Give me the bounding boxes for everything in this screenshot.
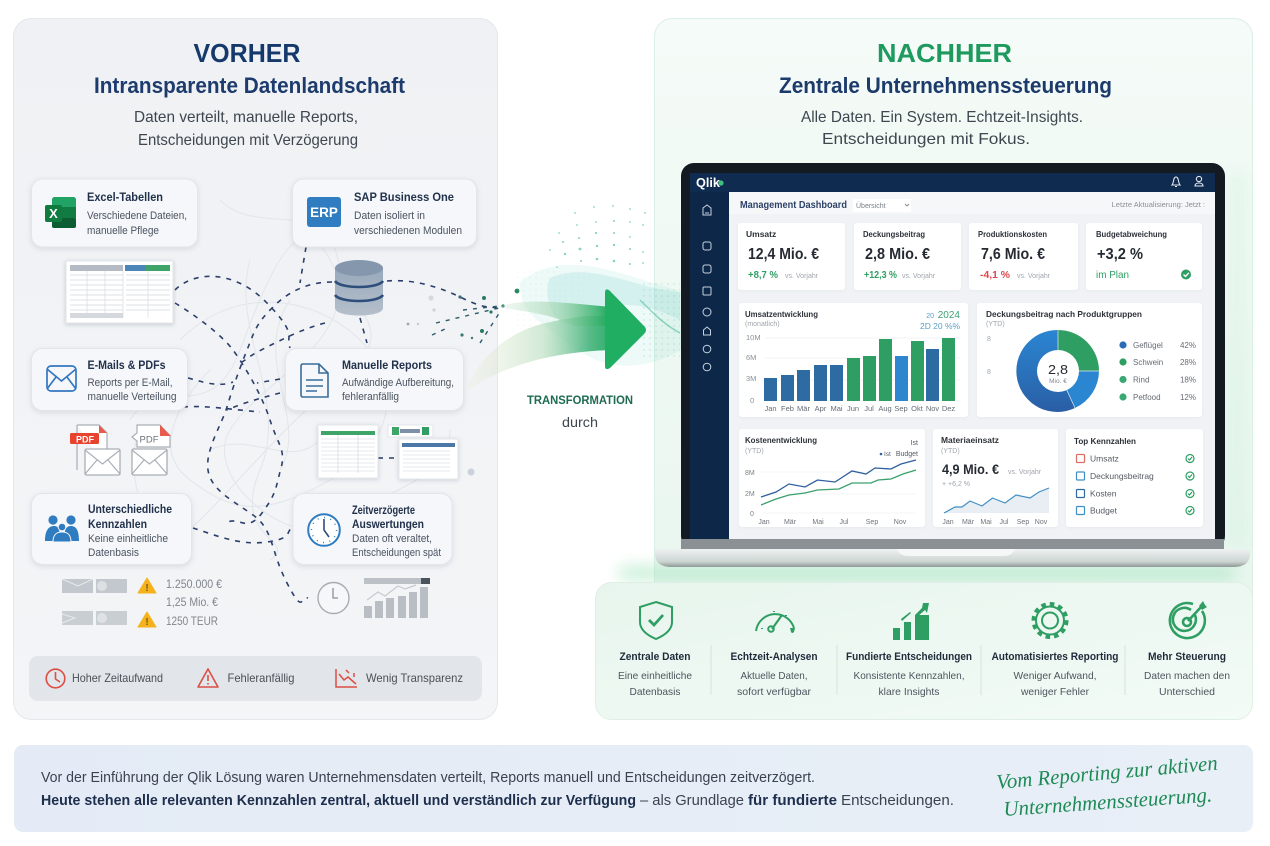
- card: E-Mails & PDFs: E-Mails & PDFs: [88, 358, 166, 372]
- kpi: Deckungsbeitrag: vs. Vorjahr: [902, 273, 936, 280]
- card: Manuelle Reports: Manuelle Reports: [342, 358, 432, 372]
- bar chart: Umsatzentwicklung: Umsatzentwicklung: [745, 309, 818, 319]
- kpi: Budgetabweichung: im Plan: [1096, 269, 1129, 281]
- subtitle: [801, 109, 1083, 148]
- card: Zeitverzögerte Auswertungen: Daten oft veraltet,: [352, 533, 432, 545]
- kpi: Deckungsbeitrag: Deckungsbeitrag: [863, 229, 925, 239]
- kpi: Produktionskosten: 7,6 Mio. €: [981, 246, 1045, 263]
- report sheet thumbnails: [318, 425, 458, 479]
- transformation arrow: [465, 205, 694, 430]
- bar chart: Umsatzentwicklung: Apr: [815, 404, 827, 413]
- icon: envelope: [47, 366, 76, 391]
- icons: bell and user: [1172, 176, 1203, 186]
- list: Top Kennzahlen: Umsatz: [1090, 454, 1119, 464]
- benefit: Fundierte Entscheidungen: Fundierte Entscheidungen: [846, 651, 972, 663]
- benefit: Zentrale Daten: Eine einheitliche: [618, 670, 692, 682]
- card: Unterschiedliche Kennzahlen: Keine einheitliche: [88, 533, 168, 545]
- line chart: Kostenentwicklung: Mär: [784, 519, 797, 526]
- line chart: Kostenentwicklung: 0: [750, 511, 754, 518]
- line chart: Kostenentwicklung: Jul: [840, 519, 849, 526]
- area chart: Materialeinsatz: Sep: [1017, 519, 1029, 526]
- subtitle: Alle Daten. Ein System. Echtzeit-Insights.: [801, 109, 1083, 126]
- card: Excel-Tabellen: Excel-Tabellen: [87, 190, 163, 204]
- footer text: [41, 769, 954, 809]
- area chart: Materialeinsatz: vs. Vorjahr: [1008, 469, 1042, 476]
- donut legend: [1119, 341, 1196, 402]
- line chart: Kostenentwicklung: Jan: [758, 519, 770, 526]
- excel sheet thumbnail: [66, 261, 173, 323]
- benefit: Mehr Steuerung: [1144, 601, 1230, 698]
- dashboard header: Letzte Aktualisierung: Jetzt :: [1112, 200, 1205, 209]
- bar chart: Umsatzentwicklung: 2024: [938, 310, 960, 321]
- area chart: Materialeinsatz: [933, 429, 1058, 527]
- bar chart: Umsatzentwicklung: Okt: [911, 404, 924, 413]
- list: Top Kennzahlen: [1066, 429, 1203, 527]
- kpi: Umsatz: vs. Vorjahr: [785, 273, 819, 280]
- line chart: Kostenentwicklung: Budget: [896, 451, 918, 458]
- card: E-Mails & PDFs: manuelle Verteilung: [88, 391, 176, 403]
- bar chart: Umsatzentwicklung: Jun: [847, 404, 859, 413]
- inconsistent figures: !: [145, 617, 149, 628]
- line chart: Kostenentwicklung: [739, 429, 925, 527]
- card: Zeitverzögerte Auswertungen: [293, 494, 452, 564]
- kpi: Umsatz: +8,7 %: [748, 269, 779, 281]
- panel: nachher: [654, 18, 1252, 618]
- donut legend: Schwein: [1133, 358, 1163, 367]
- icon: red clock: [46, 669, 65, 688]
- icon: ERP: ERP: [310, 205, 338, 220]
- benefit: Automatisiertes Reporting: weniger Fehler: [1020, 686, 1089, 698]
- kpi: Budgetabweichung: [1086, 223, 1202, 290]
- kpi: Budgetabweichung: +3,2 %: [1097, 246, 1143, 263]
- icon: document: [301, 364, 328, 397]
- kpi: Umsatz: [738, 223, 845, 290]
- donut legend: 28%: [1180, 358, 1196, 367]
- kpi: Produktionskosten: Produktionskosten: [978, 229, 1047, 239]
- laptop glow: [620, 568, 1235, 578]
- handwritten claim: [995, 751, 1219, 821]
- kpi: Produktionskosten: [969, 223, 1078, 290]
- benefit: Zentrale Daten: Zentrale Daten: [620, 651, 691, 663]
- footer text: Vor der Einführung der Qlik Lösung waren Unternehmensdaten verteilt, Reports manuell und Entscheidungen zeitverzögert.: [41, 769, 815, 786]
- donut legend: Geflügel: [1133, 341, 1163, 350]
- kpi: Produktionskosten: vs. Vorjahr: [1017, 273, 1051, 280]
- footer text: Heute stehen alle relevanten Kennzahlen zentral, aktuell und verständlich zur Verfügung: [41, 792, 636, 809]
- subtitle: Entscheidungen mit Fokus.: [822, 131, 1030, 148]
- grey clock and chart: [318, 578, 430, 618]
- kpi: Deckungsbeitrag: +12,3 %: [864, 269, 898, 281]
- card: Excel-Tabellen: Verschiedene Dateien,: [87, 210, 187, 222]
- card: E-Mails & PDFs: [32, 348, 188, 410]
- area chart: Materialeinsatz: Jul: [1000, 519, 1009, 526]
- laptop base: [655, 539, 1250, 567]
- sidebar: [690, 192, 729, 539]
- benefit: Echtzeit-Analysen: sofort verfügbar: [737, 686, 811, 698]
- card: Zeitverzögerte Auswertungen: Zeitverzögerte: [352, 503, 415, 517]
- benefit: Mehr Steuerung: Daten machen den: [1144, 670, 1230, 682]
- card: Manuelle Reports: fehleranfällig: [342, 391, 399, 403]
- benefit: Fundierte Entscheidungen: Konsistente Kennzahlen,: [854, 670, 964, 682]
- kpi: Umsatz: Umsatz: [746, 229, 776, 239]
- heading: vorher: [94, 38, 406, 98]
- card: Excel-Tabellen: manuelle Pflege: [87, 225, 159, 237]
- benefit: Automatisiertes Reporting: [992, 604, 1118, 698]
- bar chart: Umsatzentwicklung: Sep: [894, 404, 908, 413]
- footer text: für fundierte: [748, 792, 837, 809]
- area chart: Materialeinsatz: 4,9 Mio. €: [942, 461, 999, 477]
- bar chart: Umsatzentwicklung: 3M: [746, 374, 756, 383]
- footer text: Entscheidungen.: [841, 792, 954, 809]
- donut chart: Deckungsbeitrag: Deckungsbeitrag nach Produktgruppen: [986, 309, 1142, 319]
- card: Manuelle Reports: Aufwändige Aufbereitung,: [342, 377, 454, 389]
- benefit: Automatisiertes Reporting: Automatisiertes Reporting: [992, 651, 1118, 663]
- dashboard header: Management Dashboard: [740, 199, 847, 211]
- line chart: Kostenentwicklung: Ist: [911, 440, 918, 447]
- area chart: Materialeinsatz: Nov: [1035, 519, 1048, 526]
- card: Unterschiedliche Kennzahlen: Kennzahlen: [88, 517, 147, 531]
- green and grey data dots: [407, 289, 519, 343]
- bar chart: Umsatzentwicklung: 10M: [746, 333, 761, 342]
- inconsistent figures: [62, 578, 223, 628]
- icon: red warning: [198, 669, 218, 687]
- card: Zeitverzögerte Auswertungen: Auswertungen: [352, 517, 424, 531]
- teal dot field: [549, 205, 646, 268]
- donut legend: 12%: [1180, 393, 1196, 402]
- area chart: Materialeinsatz: Mai: [980, 519, 992, 526]
- heading: vorher: VORHER: [194, 38, 301, 68]
- donut chart: Deckungsbeitrag: 8: [987, 369, 991, 376]
- label: transformation: [527, 393, 633, 430]
- benefit: Fundierte Entscheidungen: klare Insights: [878, 686, 940, 698]
- benefit: Echtzeit-Analysen: Echtzeit-Analysen: [730, 651, 818, 663]
- database cylinder: [335, 260, 383, 316]
- card: Manuelle Reports: [286, 348, 464, 410]
- area chart: Materialeinsatz: Jan: [942, 519, 954, 526]
- bar chart: Umsatzentwicklung: Mai: [830, 404, 843, 413]
- pdf and mail icons: PDF: [76, 434, 95, 444]
- donut chart: Deckungsbeitrag: [977, 303, 1202, 417]
- area chart: Materialeinsatz: Mär: [962, 519, 975, 526]
- card: Unterschiedliche Kennzahlen: [32, 494, 192, 564]
- inconsistent figures: !: [145, 583, 149, 594]
- heading: vorher: Intransparente Datenlandschaft: [94, 73, 406, 98]
- area chart: Materialeinsatz: (YTD): [941, 448, 960, 455]
- line chart: Kostenentwicklung: Sep: [866, 519, 878, 526]
- subtitle: Daten verteilt, manuelle Reports,: [134, 109, 358, 126]
- kpi: Produktionskosten: -4,1 %: [980, 269, 1011, 281]
- bar chart: Umsatzentwicklung: Nov: [926, 404, 939, 413]
- benefit: Mehr Steuerung: Unterschied: [1159, 686, 1215, 698]
- donut chart: Deckungsbeitrag: 2,8: [1048, 362, 1068, 377]
- line chart: Kostenentwicklung: (YTD): [745, 448, 764, 455]
- bar chart: Umsatzentwicklung: 20: [926, 313, 934, 320]
- dashboard top bar: Qlik: [696, 176, 720, 190]
- card: SAP Business One: verschiedenen Modulen: [354, 225, 462, 237]
- bar chart: Umsatzentwicklung: 0: [750, 396, 754, 405]
- donut legend: 18%: [1180, 376, 1196, 384]
- label: transformation: TRANSFORMATION: [527, 393, 633, 407]
- benefit: Mehr Steuerung: Mehr Steuerung: [1148, 651, 1226, 663]
- bar chart: Umsatzentwicklung: Mär: [797, 404, 810, 413]
- list: Top Kennzahlen: Deckungsbeitrag: [1090, 471, 1154, 481]
- card: Unterschiedliche Kennzahlen: Unterschiedliche: [88, 502, 172, 516]
- donut chart: Deckungsbeitrag: Mio. €: [1049, 378, 1067, 385]
- heading: nachher: Zentrale Unternehmenssteuerung: [779, 73, 1112, 98]
- label: transformation: durch: [562, 414, 598, 430]
- area chart: Materialeinsatz: Materiaeinsatz: [941, 435, 999, 445]
- bar chart: Umsatzentwicklung: (monatlich): [745, 321, 780, 328]
- icon: red falling chart: [336, 669, 357, 687]
- dashed connectors: [175, 247, 497, 602]
- dashboard header: Übersicht: [856, 202, 886, 210]
- card: Unterschiedliche Kennzahlen: Datenbasis: [88, 547, 139, 559]
- icon: excel: [45, 197, 76, 228]
- area chart: Materialeinsatz: + +6,2 %: [942, 481, 970, 488]
- icon: ERP: [307, 197, 341, 227]
- card: E-Mails & PDFs: Reports per E-Mail,: [88, 377, 172, 389]
- bar chart: Umsatzentwicklung: Dez: [942, 404, 955, 413]
- inconsistent figures: 1.250.000 €: [166, 579, 223, 591]
- donut legend: Petfood: [1133, 393, 1161, 402]
- card: SAP Business One: SAP Business One: [354, 190, 454, 204]
- donut legend: Rind: [1133, 376, 1149, 384]
- benefit: Zentrale Daten: Datenbasis: [630, 686, 680, 698]
- benefit: Echtzeit-Analysen: [730, 611, 818, 698]
- handwritten claim: Unternehmenssteuerung.: [1003, 782, 1213, 821]
- laptop dashboard: [655, 163, 1250, 567]
- card: Zeitverzögerte Auswertungen: Entscheidungen spät: [352, 547, 441, 559]
- bar chart: Umsatzentwicklung: [739, 303, 968, 417]
- bar chart: Umsatzentwicklung: 6M: [746, 353, 756, 362]
- line chart: Kostenentwicklung: Mai: [812, 519, 824, 526]
- handwritten claim: Vom Reporting zur aktiven: [995, 751, 1219, 794]
- card: SAP Business One: [292, 179, 476, 247]
- benefit: Automatisiertes Reporting: Weniger Aufwand,: [1014, 670, 1096, 682]
- bar chart: Umsatzentwicklung: Feb: [781, 404, 794, 413]
- panel: vorher: [14, 18, 519, 720]
- icon: people: [45, 515, 79, 542]
- warning bar: Hoher Zeitaufwand: [72, 671, 163, 685]
- donut chart: Deckungsbeitrag: 8: [987, 336, 991, 343]
- subtitle: [134, 109, 358, 149]
- subtitle: Entscheidungen mit Verzögerung: [138, 132, 358, 149]
- icon: clock: [308, 514, 340, 546]
- list: Top Kennzahlen: Budget: [1090, 506, 1118, 516]
- benefit: Echtzeit-Analysen: Aktuelle Daten,: [740, 670, 808, 682]
- warning bar: Wenig Transparenz: [366, 671, 463, 685]
- bar chart: Umsatzentwicklung: Jul: [864, 404, 874, 413]
- donut legend: 42%: [1180, 341, 1196, 350]
- pdf and mail icons: PDF: [140, 434, 159, 446]
- card: SAP Business One: Daten isoliert in: [354, 210, 425, 222]
- benefit: Zentrale Daten: [618, 602, 692, 698]
- panel: benefits: [596, 582, 1252, 720]
- inconsistent figures: 1250 TEUR: [166, 616, 218, 628]
- background scribbles: [130, 200, 474, 560]
- footer text: – als Grundlage: [640, 792, 744, 809]
- donut chart: Deckungsbeitrag: (YTD): [986, 321, 1005, 328]
- dashboard header: [740, 199, 1205, 212]
- dashboard top bar: [690, 173, 1215, 192]
- line chart: Kostenentwicklung: 8M: [745, 470, 755, 477]
- bar chart: Umsatzentwicklung: Aug: [878, 404, 892, 413]
- line chart: Kostenentwicklung: 2M: [745, 491, 755, 498]
- heading: nachher: [779, 38, 1112, 98]
- warning bar: [29, 656, 482, 701]
- heading: nachher: NACHHER: [877, 38, 1012, 68]
- kpi: Budgetabweichung: Budgetabweichung: [1096, 229, 1167, 239]
- footer summary: [14, 745, 1253, 832]
- line chart: Kostenentwicklung: Kostenentwicklung: [745, 435, 817, 445]
- bar chart: Umsatzentwicklung: 2D 20 %%: [920, 322, 960, 331]
- bar chart: Umsatzentwicklung: Jan: [764, 404, 777, 413]
- kpi: Deckungsbeitrag: 2,8 Mio. €: [865, 246, 930, 263]
- list: Top Kennzahlen: Kosten: [1090, 488, 1117, 498]
- kpi: Umsatz: 12,4 Mio. €: [748, 246, 819, 263]
- kpi: Deckungsbeitrag: [854, 223, 961, 290]
- warning bar: Fehleranfällig: [228, 671, 294, 685]
- pdf and mail icons: [70, 425, 171, 475]
- line chart: Kostenentwicklung: Nov: [894, 519, 907, 526]
- list: Top Kennzahlen: Top Kennzahlen: [1074, 436, 1136, 446]
- inconsistent figures: 1,25 Mio. €: [166, 597, 219, 609]
- line chart: Kostenentwicklung: Ist: [884, 451, 891, 458]
- icon: excel: X: [49, 206, 58, 221]
- dashboard content: [729, 192, 1215, 539]
- card: Excel-Tabellen: [32, 179, 198, 247]
- benefit: Fundierte Entscheidungen: [846, 603, 972, 698]
